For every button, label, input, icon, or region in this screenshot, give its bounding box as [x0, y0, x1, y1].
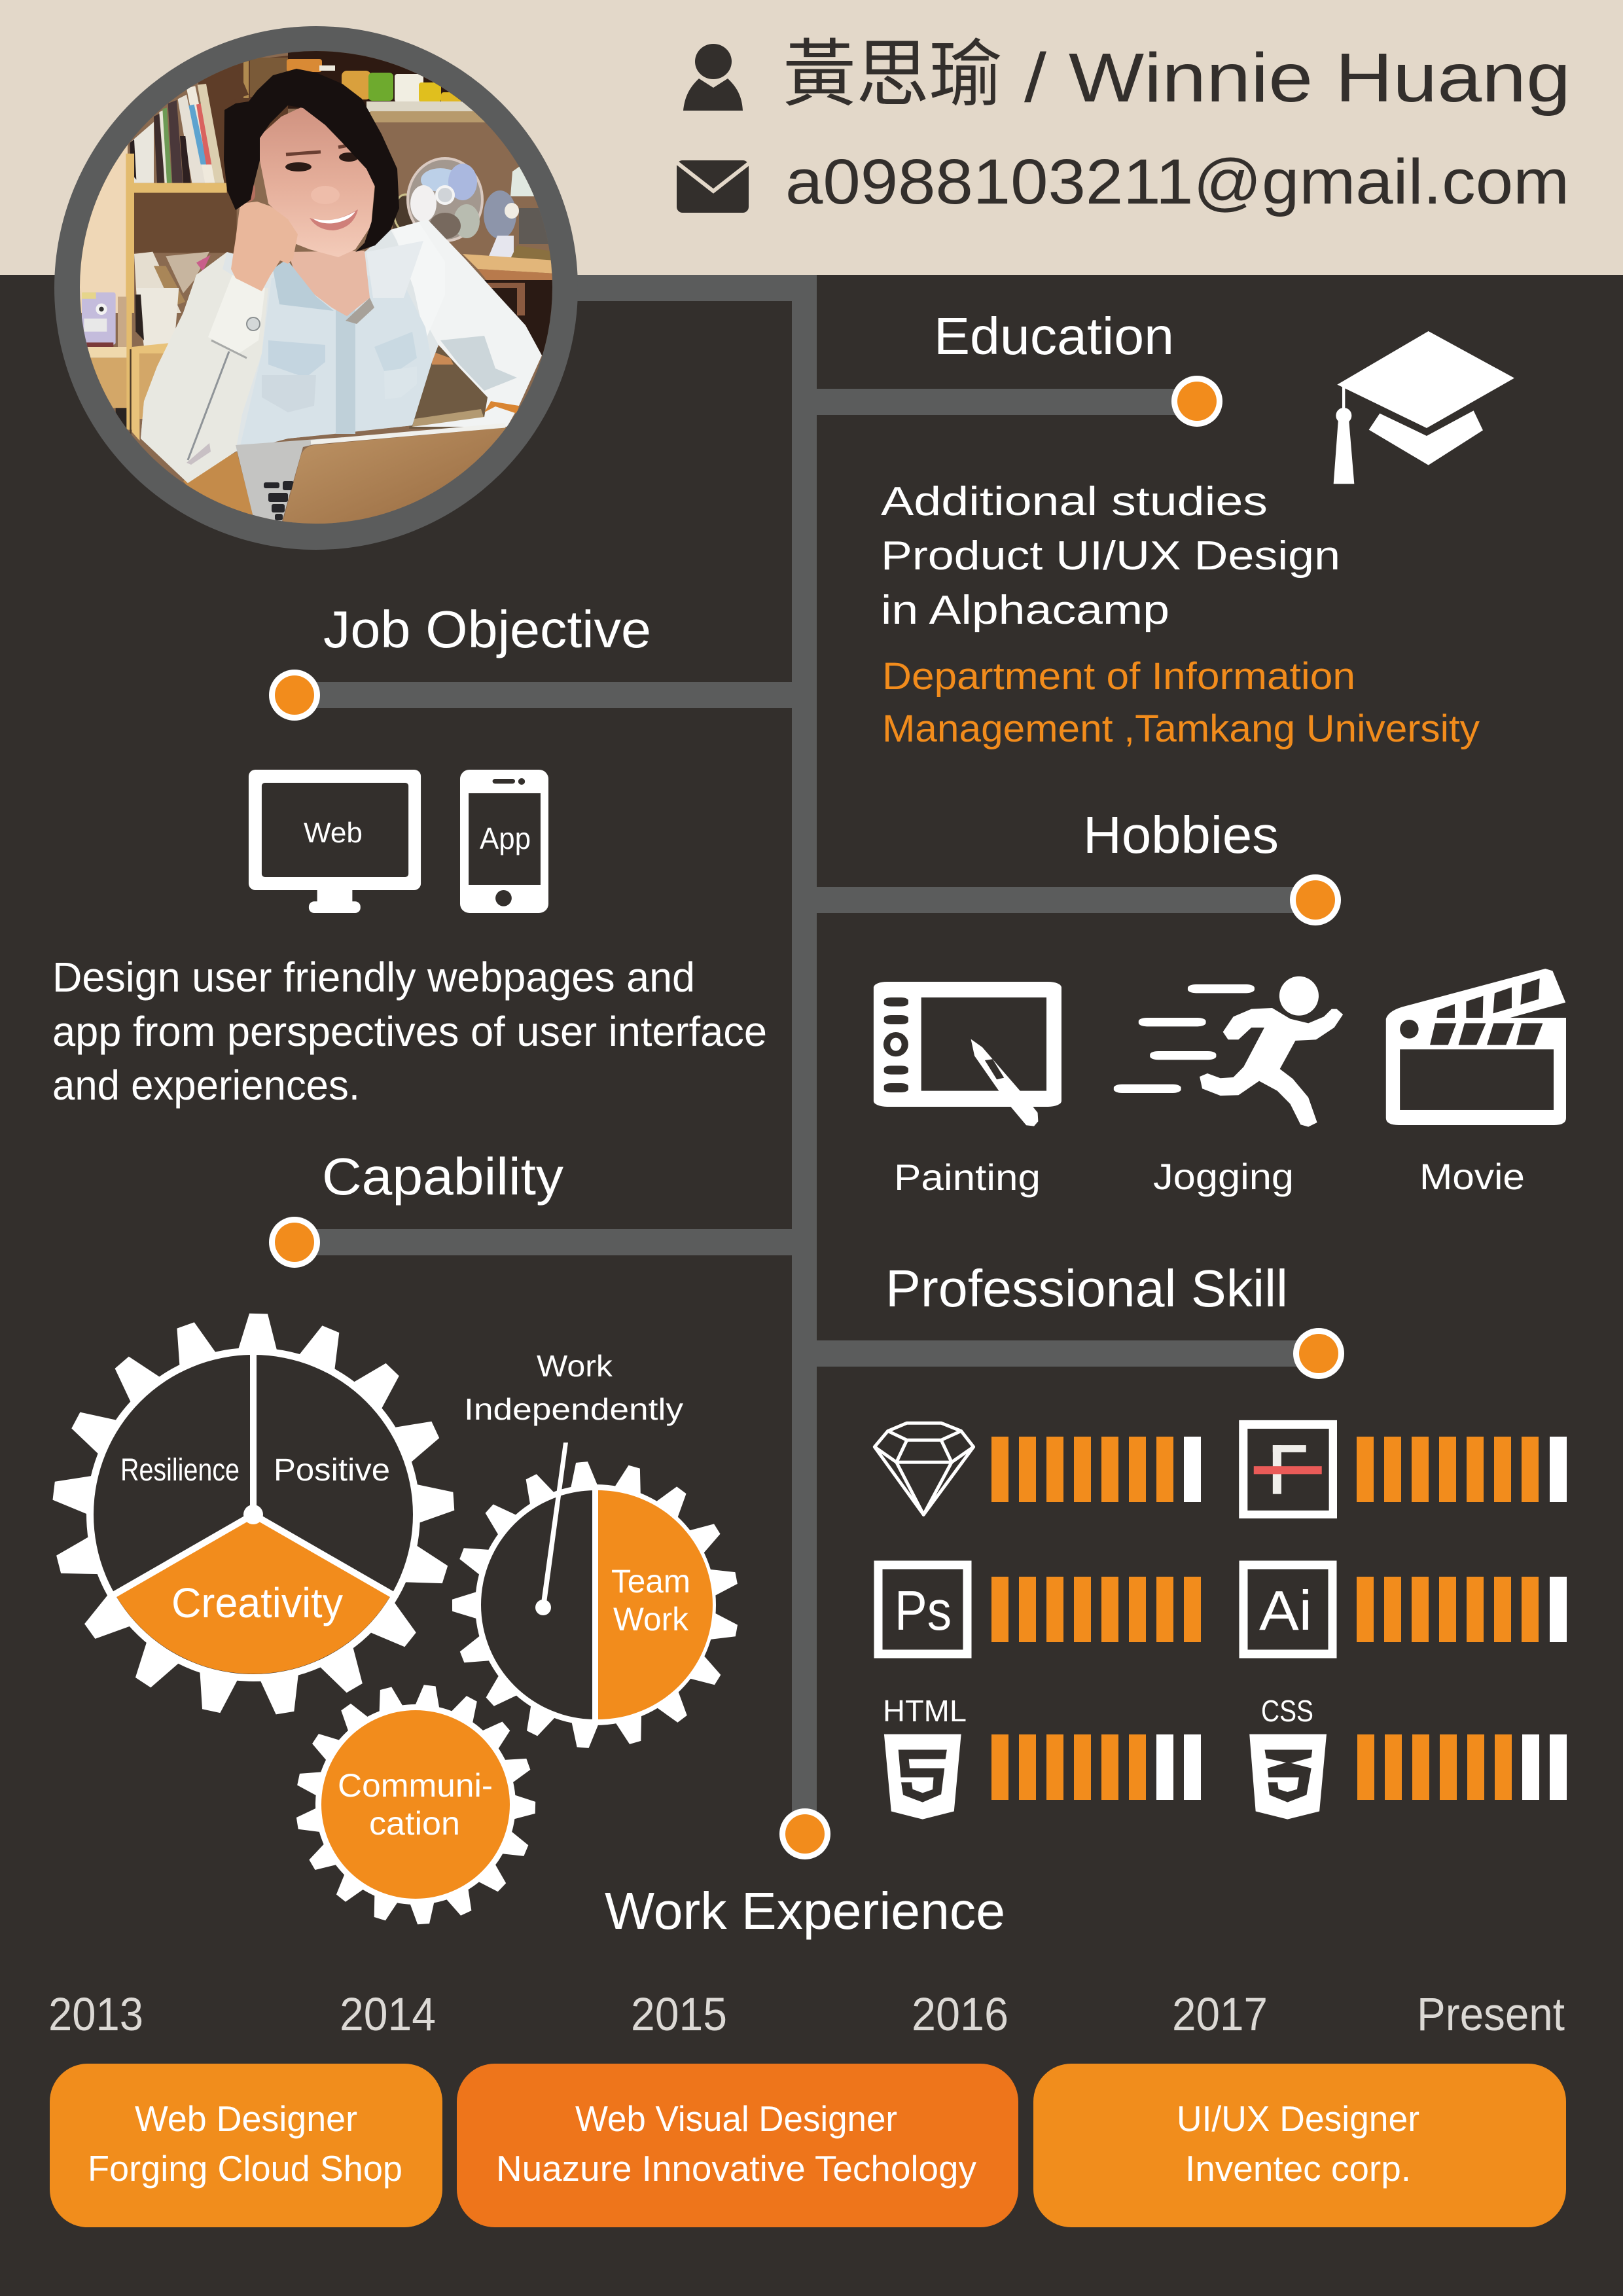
profile photo: [54, 26, 578, 550]
skill: CSS: CSS: [1261, 1694, 1313, 1728]
marker: Hobbies: [1290, 874, 1341, 925]
icon: person: [683, 44, 743, 111]
email: a0988103211@gmail.com: [785, 146, 1569, 217]
name: / Winnie Huang: [1024, 39, 1571, 117]
icon: phone: App: [480, 821, 531, 855]
job: UI/UX Designer: [1033, 2064, 1566, 2227]
skill: Sketch: [874, 1423, 1201, 1515]
heading: Education: Education: [934, 307, 1174, 365]
laptop: [236, 437, 344, 524]
back gap and bracelet: [409, 347, 488, 429]
marker: Capability: [269, 1217, 320, 1268]
label: Work Independently: Work: [537, 1349, 613, 1383]
icon: jogging runner: [1114, 977, 1343, 1127]
name: [783, 33, 1571, 117]
heading: Hobbies: Hobbies: [1083, 806, 1279, 864]
icon: monitor: [249, 770, 421, 913]
icon: monitor: Web: [304, 817, 363, 849]
table: [183, 452, 253, 515]
right shelf, desk and fan: [393, 158, 556, 355]
job: Web Visual Designer: Nuazure Innovative Techology: [496, 2148, 976, 2189]
hair: [224, 69, 399, 252]
job objective text: and experiences.: [52, 1062, 360, 1109]
skill: Photoshop: Ps: [895, 1580, 952, 1642]
mugs on shelf: [287, 59, 461, 105]
icon: graduation cap: [1334, 331, 1514, 484]
marker: Professional Skill: [1293, 1328, 1344, 1379]
icon: movie clapper: [1386, 969, 1566, 1125]
hobby labels: Jogging: [1153, 1156, 1294, 1197]
room background: [79, 51, 556, 526]
education text: Additional studies: [881, 479, 1268, 524]
education department: Department of Information: [882, 655, 1355, 698]
education text: Product UI/UX Design: [881, 533, 1340, 579]
marker: Education: [1171, 376, 1222, 427]
gear: medium: [438, 1443, 753, 1761]
job: Web Designer: [50, 2064, 442, 2227]
gear: large: Positive: [274, 1453, 390, 1488]
job: Web Visual Designer: [457, 2064, 1018, 2227]
timeline years: [48, 1989, 1565, 2041]
timeline years: 2015: [631, 1989, 727, 2041]
timeline years: 2014: [340, 1989, 436, 2041]
job: Web Visual Designer: Web Visual Designer: [575, 2098, 897, 2139]
timeline years: Present: [1417, 1989, 1565, 2041]
job objective text: Design user friendly webpages and: [52, 954, 695, 1001]
marker: Work Experience: [779, 1808, 830, 1859]
heading: Capability: Capability: [322, 1147, 563, 1206]
gear: large: Resilience: [120, 1453, 240, 1488]
skill: Photoshop: [878, 1565, 1201, 1654]
skill: HTML: [883, 1694, 1201, 1820]
eyes, nose and mouth: [285, 143, 359, 230]
skill: Illustrator: Ai: [1259, 1580, 1312, 1642]
gear: medium: Team: [611, 1563, 690, 1600]
neck: [288, 251, 370, 316]
job: Web Designer: Forging Cloud Shop: [88, 2148, 402, 2189]
face: [257, 103, 375, 257]
timeline years: 2017: [1172, 1989, 1268, 2041]
skill: HTML: HTML: [883, 1694, 967, 1728]
shirt: [141, 219, 542, 483]
icon: phone: [460, 770, 548, 913]
gear: small: Communi-: [338, 1767, 493, 1804]
job objective text: app from perspectives of user interface: [52, 1008, 767, 1055]
collar: [273, 259, 334, 311]
icon: envelope: [677, 160, 749, 213]
hobby labels: Painting: [894, 1157, 1041, 1198]
heading: Work Experience: Work Experience: [605, 1882, 1005, 1940]
education text: in Alphacamp: [881, 588, 1169, 633]
hand: [231, 202, 298, 291]
gear: large: [46, 1308, 460, 1721]
skill: Figma: [1239, 1420, 1567, 1518]
skill: CSS: [1249, 1694, 1567, 1820]
gear: small: cation: [369, 1805, 460, 1842]
heading: Job Objective: Job Objective: [323, 600, 651, 658]
job: Web Designer: Web Designer: [135, 2098, 357, 2139]
timeline years: 2013: [48, 1989, 143, 2041]
education department: Management ,Tamkang University: [882, 708, 1480, 750]
gear: large: Creativity: [171, 1579, 343, 1626]
education department: [882, 655, 1480, 750]
skill: Illustrator: [1243, 1565, 1567, 1654]
name: 黃思瑜: [783, 33, 1003, 115]
hobby labels: [894, 1156, 1525, 1198]
hobby labels: Movie: [1419, 1156, 1525, 1197]
icon: painting tablet: [874, 982, 1061, 1126]
label: Work Independently: [464, 1349, 683, 1426]
label: Work Independently: Independently: [464, 1392, 683, 1426]
lower-left shelf and device: [79, 288, 179, 440]
job: UI/UX Designer: Inventec corp.: [1185, 2148, 1411, 2189]
education text: [881, 479, 1340, 633]
job: UI/UX Designer: UI/UX Designer: [1177, 2098, 1419, 2139]
marker: Job Objective: [269, 670, 320, 721]
timeline trunk and branches: [308, 275, 1321, 1834]
upper books: [126, 64, 249, 313]
gear: medium: Work: [613, 1601, 689, 1638]
gear: small: [282, 1672, 549, 1938]
job objective text: [52, 954, 767, 1109]
heading: Professional Skill: Professional Skill: [885, 1259, 1288, 1318]
header band: [0, 0, 1623, 275]
timeline years: 2016: [912, 1989, 1008, 2041]
